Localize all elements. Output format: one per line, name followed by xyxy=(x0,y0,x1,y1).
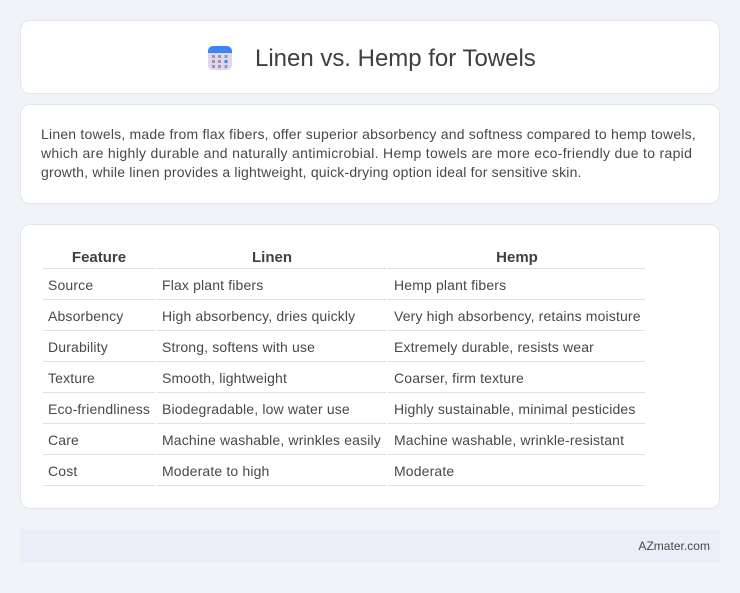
row: Care: Care xyxy=(48,432,79,448)
header row: Feature xyxy=(72,249,126,266)
summary text: which are highly durable and naturally antimicrobial. Hemp towels are more eco-friendly due to rapid xyxy=(41,145,692,161)
row: Absorbency: Absorbency xyxy=(48,308,123,324)
row: Care xyxy=(48,432,624,448)
row: Source: Flax plant fibers xyxy=(162,277,263,293)
row: Texture xyxy=(48,370,524,386)
row: Source: Hemp plant fibers xyxy=(394,277,506,293)
summary text: growth, while linen provides a lightweight, quick-drying option ideal for sensitive skin. xyxy=(41,164,582,180)
row: Absorbency xyxy=(48,308,641,324)
row: Eco-friendliness: Eco-friendliness xyxy=(48,401,150,417)
row: Source: Source xyxy=(48,277,93,293)
row: Absorbency: Very high absorbency, retains moisture xyxy=(394,308,641,324)
row: Cost: Cost xyxy=(48,463,77,479)
panel: comparison table card xyxy=(20,224,720,509)
row: Source xyxy=(48,277,506,293)
row: Durability: Extremely durable, resists wear xyxy=(394,339,594,355)
row: Cost xyxy=(48,463,454,479)
row: Eco-friendliness xyxy=(48,401,635,417)
row: Eco-friendliness: Biodegradable, low water use xyxy=(162,401,350,417)
header row xyxy=(72,249,538,266)
icon: calendar xyxy=(208,46,232,70)
row: Care: Machine washable, wrinkle-resistant xyxy=(394,432,624,448)
row: Durability: Strong, softens with use xyxy=(162,339,315,355)
summary text: Linen towels, made from flax fibers, offer superior absorbency and softness compared to hemp towels, xyxy=(41,126,696,142)
row: Durability xyxy=(48,339,594,355)
row: Texture: Texture xyxy=(48,370,95,386)
row: Texture: Smooth, lightweight xyxy=(162,370,287,386)
row: Cost: Moderate xyxy=(394,463,454,479)
footer bar xyxy=(20,529,720,563)
title: Linen vs. Hemp for Towels xyxy=(255,45,536,72)
header row: Linen xyxy=(252,249,292,266)
panel: summary text card xyxy=(20,104,720,204)
panel: title card xyxy=(20,20,720,94)
row: Eco-friendliness: Highly sustainable, minimal pesticides xyxy=(394,401,635,417)
footer credit: AZmater.com xyxy=(638,539,710,553)
summary text xyxy=(41,126,696,180)
row: Care: Machine washable, wrinkles easily xyxy=(162,432,381,448)
header row: Hemp xyxy=(496,249,538,266)
row: Cost: Moderate to high xyxy=(162,463,269,479)
comparison table xyxy=(43,249,645,486)
row: Absorbency: High absorbency, dries quickly xyxy=(162,308,355,324)
row: Texture: Coarser, firm texture xyxy=(394,370,524,386)
row: Durability: Durability xyxy=(48,339,108,355)
